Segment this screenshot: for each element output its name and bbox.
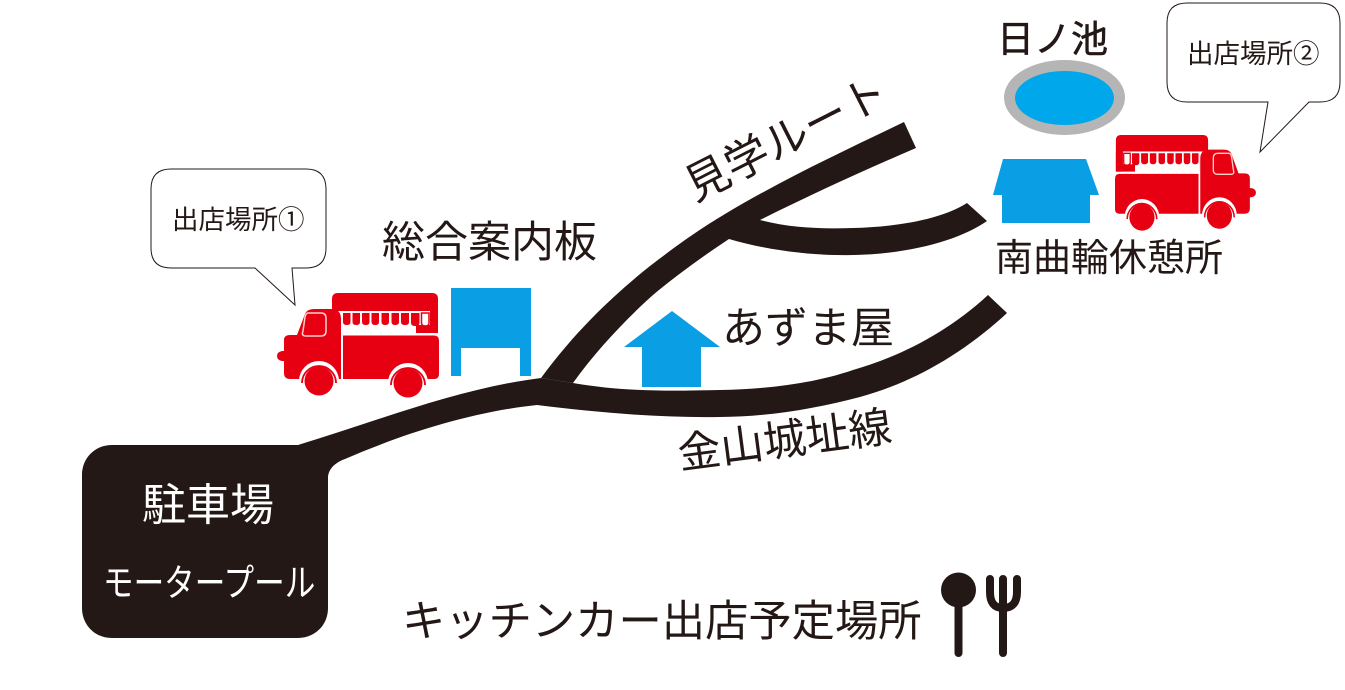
callout: location 1: 出店場所① bbox=[172, 205, 304, 235]
parking lot with access road bbox=[82, 295, 1007, 638]
icon: pond bbox=[1004, 60, 1125, 135]
icon: information board bbox=[451, 288, 531, 376]
icon: kitchen car 2 bbox=[1115, 135, 1256, 236]
label: parking: 駐車場 bbox=[142, 481, 274, 530]
label: Kanayama castle line: 金山城址線 bbox=[675, 403, 894, 479]
icon: kitchen car 1 bbox=[277, 293, 439, 403]
icon: rest area building bbox=[993, 159, 1099, 223]
label: Hinoike pond: 日ノ池 bbox=[997, 19, 1108, 60]
tour route road bbox=[541, 122, 987, 383]
callout: location 1 bbox=[151, 169, 326, 305]
label: azumaya: あずま屋 bbox=[722, 305, 894, 353]
label: tour route: 見学ルート bbox=[677, 67, 896, 211]
icon: spoon and fork bbox=[941, 572, 1017, 653]
label: planned kitchen car location: キッチンカー出店予定場所 bbox=[402, 598, 922, 646]
label: motor pool: モータープール bbox=[103, 563, 315, 605]
label: information board: 総合案内板 bbox=[382, 219, 597, 267]
label: south enclosure rest area: 南曲輪休憩所 bbox=[995, 238, 1223, 280]
callout: location 2: 出店場所② bbox=[1187, 39, 1320, 69]
callout: location 2 bbox=[1167, 3, 1340, 152]
icon: azumaya arrow house bbox=[624, 311, 720, 387]
roads and parking area bbox=[82, 122, 1007, 638]
